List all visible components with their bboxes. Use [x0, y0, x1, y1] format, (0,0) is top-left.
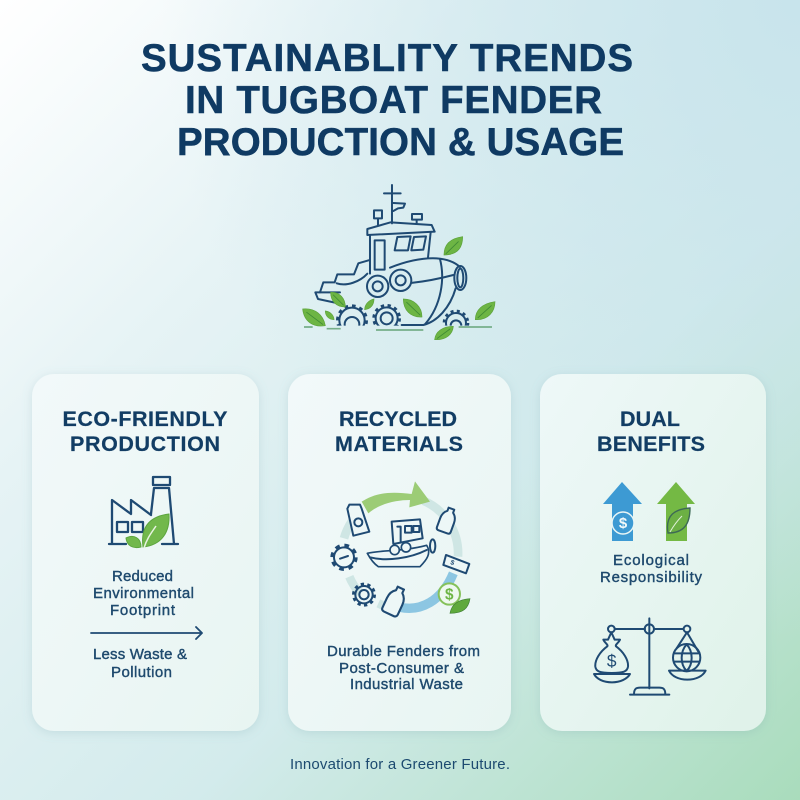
icon: balance scale	[594, 618, 706, 695]
heading: eco-friendly production: PRODUCTION	[70, 432, 220, 456]
text: ecological responsibility: Ecological	[613, 552, 689, 569]
text: less waste and pollution	[93, 646, 187, 681]
heading: dual benefits	[597, 407, 705, 456]
heading: recycled materials	[335, 407, 463, 456]
text: durable fenders	[327, 643, 480, 693]
heading: eco-friendly production: ECO-FRIENDLY	[62, 407, 228, 431]
icon: blue arrow with dollar	[603, 482, 642, 541]
text: reduced environmental footprint	[93, 568, 194, 619]
title: IN TUGBOAT FENDER	[185, 79, 602, 122]
heading: recycled materials: RECYCLED	[339, 407, 457, 431]
icon: recycling loop with boat: $	[449, 559, 455, 567]
panel: recycled materials	[288, 374, 511, 731]
text: durable fenders: Post-Consumer &	[339, 660, 464, 677]
text: durable fenders: Industrial Waste	[350, 676, 463, 693]
arrow	[91, 627, 202, 639]
heading: eco-friendly production	[62, 407, 228, 456]
text: ecological responsibility: Responsibility	[600, 569, 702, 586]
panel: dual benefits	[540, 374, 766, 731]
icon: tugboat with leaves and gears	[303, 185, 495, 340]
icon: blue arrow with dollar: $	[619, 515, 628, 532]
title: SUSTAINABLITY TRENDS	[141, 37, 633, 80]
title: PRODUCTION & USAGE	[177, 121, 624, 164]
icon: balance scale: $	[607, 651, 617, 671]
heading: dual benefits: BENEFITS	[597, 432, 705, 456]
text: less waste and pollution: Less Waste &	[93, 646, 187, 663]
icon: green arrow with leaf	[657, 482, 695, 541]
text: reduced environmental footprint: Reduced	[112, 568, 173, 585]
text: reduced environmental footprint: Footprint	[110, 602, 176, 619]
panel: eco-friendly production	[32, 374, 259, 731]
heading: dual benefits: DUAL	[620, 407, 680, 431]
text: ecological responsibility	[600, 552, 702, 586]
footer tagline: Innovation for a Greener Future.	[290, 756, 510, 773]
text: less waste and pollution: Pollution	[111, 664, 172, 681]
heading: recycled materials: MATERIALS	[335, 432, 463, 456]
title	[141, 37, 633, 164]
icon: recycling loop with boat: $	[445, 586, 454, 603]
icon: factory with leaf	[109, 477, 178, 548]
text: reduced environmental footprint: Environmental	[93, 585, 194, 602]
icon: recycling loop with boat	[332, 481, 470, 617]
text: durable fenders: Durable Fenders from	[327, 643, 480, 660]
